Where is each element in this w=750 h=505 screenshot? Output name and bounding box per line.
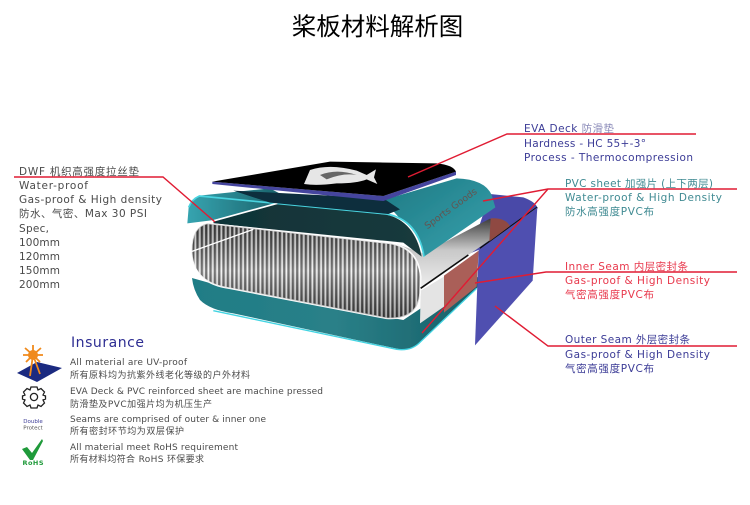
text block: outer seam (565, 333, 710, 375)
insurance text: pressed: 防滑垫及PVC加强片均为机压生产 (70, 398, 212, 410)
bottom PVC sheet (192, 277, 478, 349)
insurance text: seams: 所有密封环节均为双层保护 (70, 425, 184, 437)
white edge line (214, 203, 277, 221)
insurance text: seams: Seams are comprised of outer & inner one (70, 415, 266, 425)
text block: inner seam (565, 260, 710, 301)
text block: DWF: DWF 机织高强度拉丝垫 (19, 165, 140, 178)
icon: double protect: Protect (23, 426, 44, 432)
icon: double protect: Double (23, 419, 43, 425)
insurance text: RoHS (70, 443, 238, 465)
text block: DWF: 120mm (19, 251, 60, 263)
text block: EVA deck: EVA Deck 防滑垫 (524, 122, 614, 135)
insurance text: UV (70, 358, 250, 381)
insurance text: UV: 所有原料均为抗紫外线老化等级的户外材料 (70, 369, 250, 381)
text block: EVA deck: Hardness - HC 55+-3° (524, 138, 646, 150)
text block: PVC sheet (565, 177, 722, 218)
top PVC sheet left flap (187, 188, 303, 223)
icon: gear (22, 387, 46, 408)
text block: PVC sheet: Water-proof & High Density (565, 192, 722, 204)
outer seam (475, 207, 537, 345)
text block: EVA deck: Process - Thermocompression (524, 152, 693, 164)
inner seam (444, 251, 479, 313)
printed brand on top sheet: Sports Goods (423, 186, 480, 232)
text block: DWF: Gas-proof & High density (19, 194, 162, 206)
text block: DWF: 150mm (19, 265, 60, 277)
speckled shadow under deck (233, 191, 400, 214)
text block: inner seam: 气密高强度PVC布 (565, 288, 654, 301)
insurance text: RoHS: 所有材料均符合 RoHS 环保要求 (70, 453, 204, 465)
EVA deck (212, 162, 456, 196)
line: PVC sheet (422, 189, 737, 333)
drop-stitch core face (192, 223, 421, 318)
callout lines (14, 134, 737, 346)
text block: PVC sheet: PVC sheet 加强片 (上下两层) (565, 177, 713, 190)
insurance text: RoHS: All material meet RoHS requirement (70, 443, 238, 453)
fish logo (304, 167, 377, 185)
icon: double protect (23, 419, 44, 432)
text block: outer seam: 气密高强度PVC布 (565, 362, 654, 375)
line: EVA deck (408, 134, 696, 177)
text block: EVA deck (524, 122, 693, 164)
text block: DWF: Water-proof (19, 180, 88, 192)
text block: DWF: Spec, (19, 223, 49, 235)
fish shading (320, 172, 357, 179)
bottom sheet cyan edge (213, 288, 477, 350)
text block: DWF: 防水、气密、Max 30 PSI (19, 207, 147, 220)
text block: DWF (19, 165, 162, 291)
brown inner seam rear (489, 218, 510, 241)
text block: inner seam: Gas-proof & High Density (565, 275, 710, 287)
text block: outer seam: Gas-proof & High Density (565, 349, 710, 361)
outer seam back part (470, 194, 537, 253)
dark underside of the top sheet (213, 203, 422, 257)
insurance heading: Insurance (71, 335, 144, 351)
fish body (304, 167, 377, 185)
text block: inner seam: Inner Seam 内层密封条 (565, 260, 688, 273)
line: inner seam (475, 272, 737, 283)
insurance text: UV: All material are UV-proof (70, 358, 188, 368)
top sheet cyan front edge (189, 196, 424, 257)
core face shading (192, 223, 421, 318)
line: outer seam (495, 306, 737, 346)
icon: sun over diamond (17, 345, 62, 382)
paddle board material cutaway illustration (187, 162, 537, 350)
insurance text: pressed: EVA Deck & PVC reinforced sheet are machine pressed (70, 387, 323, 397)
insurance text: pressed (70, 387, 323, 410)
icon: RoHS tick (22, 439, 44, 467)
line: DWF (14, 177, 215, 222)
insurance text: seams (70, 415, 266, 437)
text block: DWF: 200mm (19, 279, 60, 291)
core side wall (397, 219, 507, 288)
text block: DWF: 100mm (19, 237, 60, 249)
top PVC sheet right part (383, 178, 495, 257)
core side lower wall (420, 275, 447, 323)
black seam line (421, 207, 537, 288)
text block: outer seam: Outer Seam 外层密封条 (565, 333, 690, 346)
text block: PVC sheet: 防水高强度PVC布 (565, 205, 654, 218)
icon: RoHS tick: RoHS (22, 459, 44, 467)
title: 桨板材料解析图 (292, 13, 463, 41)
white fabric line across ribs (191, 229, 253, 252)
EVA deck edge (212, 172, 456, 201)
